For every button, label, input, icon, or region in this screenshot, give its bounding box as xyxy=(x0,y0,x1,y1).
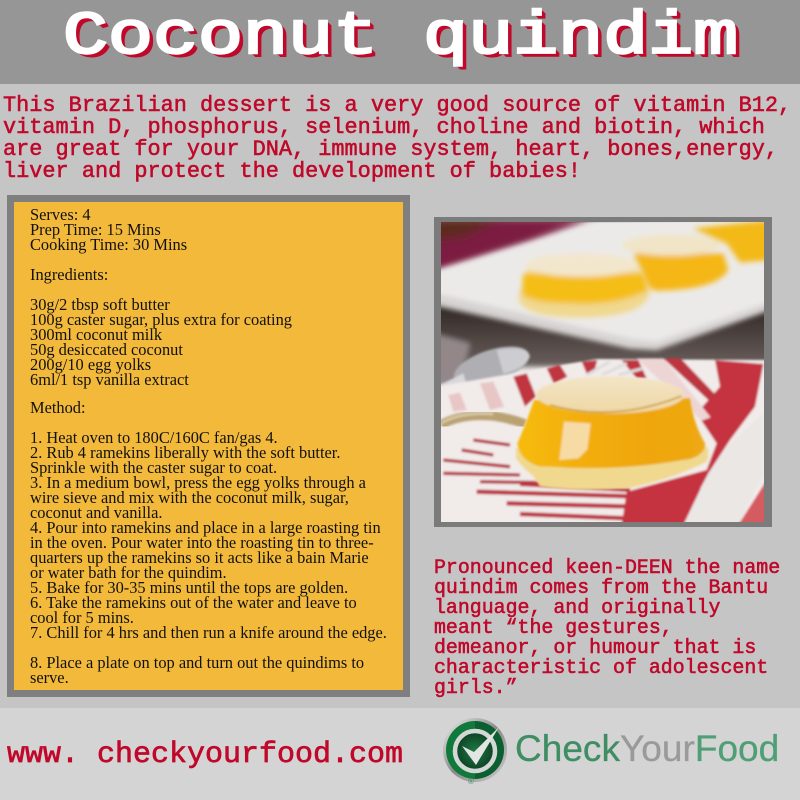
ingredients list: 300ml coconut milk xyxy=(30,325,162,344)
ingredients list: 200g/10 egg yolks xyxy=(30,355,151,374)
method steps: 6. Take the ramekins out of the water and leave to xyxy=(30,593,357,612)
recipe servings and times: Cooking Time: 30 Mins xyxy=(30,235,187,254)
front plate xyxy=(437,358,770,530)
method steps: 1. Heat oven to 180C/160C fan/gas 4. xyxy=(30,428,278,447)
dark table xyxy=(433,305,770,387)
header band xyxy=(0,0,800,84)
method steps: 4. Pour into ramekins and place in a large roasting tin xyxy=(30,518,381,537)
method steps: 8. Place a plate on top and turn out the quindims to xyxy=(30,653,364,672)
ingredients list xyxy=(30,295,292,389)
method steps: 3. In a medium bowl, press the egg yolks through a xyxy=(30,473,366,492)
method steps: serve. xyxy=(30,668,69,687)
method steps: 2. Rub 4 ramekins liberally with the soft butter. xyxy=(30,443,340,462)
logo wordmark: CheckYourFood xyxy=(515,728,779,769)
website url: www. checkyourfood.com xyxy=(7,738,403,772)
ingredients heading: Ingredients: xyxy=(30,265,108,284)
photo: quindim dessert xyxy=(434,217,772,527)
method steps: quarters up the ramekins so it acts like a bain Marie xyxy=(30,548,369,567)
back plate xyxy=(437,217,770,349)
method steps: 7. Chill for 4 hrs and then run a knife around the edge. xyxy=(30,623,387,642)
method steps: Sprinkle with the caster sugar to coat. xyxy=(30,458,277,477)
ingredients list: 6ml/1 tsp vanilla extract xyxy=(30,370,189,389)
icon: check badge xyxy=(443,718,507,786)
spoon xyxy=(441,345,531,386)
method steps: wire sieve and mix with the coconut milk, sugar, xyxy=(30,488,349,507)
method steps: cool for 5 mins. xyxy=(30,608,134,627)
method steps: in the oven. Pour water into the roasting tin to three- xyxy=(30,533,374,552)
method steps: 5. Bake for 30-35 mins until the tops are golden. xyxy=(30,578,348,597)
recipe servings and times: Prep Time: 15 Mins xyxy=(30,220,161,239)
logo: CheckYourFood xyxy=(443,718,779,786)
pronunciation note: Pronounced keen-DEEN the name quindim comes from the Bantu language, and originally meant “the gestures, demeanor, or humour that is characteristic of adolescent girls.” xyxy=(434,556,780,699)
footer band xyxy=(0,708,800,800)
recipe servings and times xyxy=(30,205,187,254)
fork xyxy=(441,414,525,425)
icon: check badge: ® xyxy=(468,777,474,786)
back quindim 1 xyxy=(518,253,650,317)
method heading: Method: xyxy=(30,398,86,417)
ingredients list: 30g/2 tbsp soft butter xyxy=(30,295,170,314)
front quindim xyxy=(516,376,708,490)
dark red backdrop xyxy=(441,222,594,272)
ingredients list: 50g desiccated coconut xyxy=(30,340,183,359)
panel: recipe xyxy=(7,195,410,697)
method steps xyxy=(30,428,387,687)
intro text: This Brazilian dessert is a very good source of vitamin B12, vitamin D, phosphorus, selenium, choline and biotin, which are great for your DNA, immune system, heart, bones,energy, liver and protect the development of babies! xyxy=(3,93,791,184)
title: Coconut quindim xyxy=(63,3,738,71)
ingredients list: 100g caster sugar, plus extra for coating xyxy=(30,310,292,329)
back quindim 3 xyxy=(693,220,770,263)
recipe servings and times: Serves: 4 xyxy=(30,205,91,224)
back quindim 2 xyxy=(622,234,728,291)
method steps: or water bath for the quindim. xyxy=(30,563,227,582)
method steps: coconut and vanilla. xyxy=(30,503,162,522)
